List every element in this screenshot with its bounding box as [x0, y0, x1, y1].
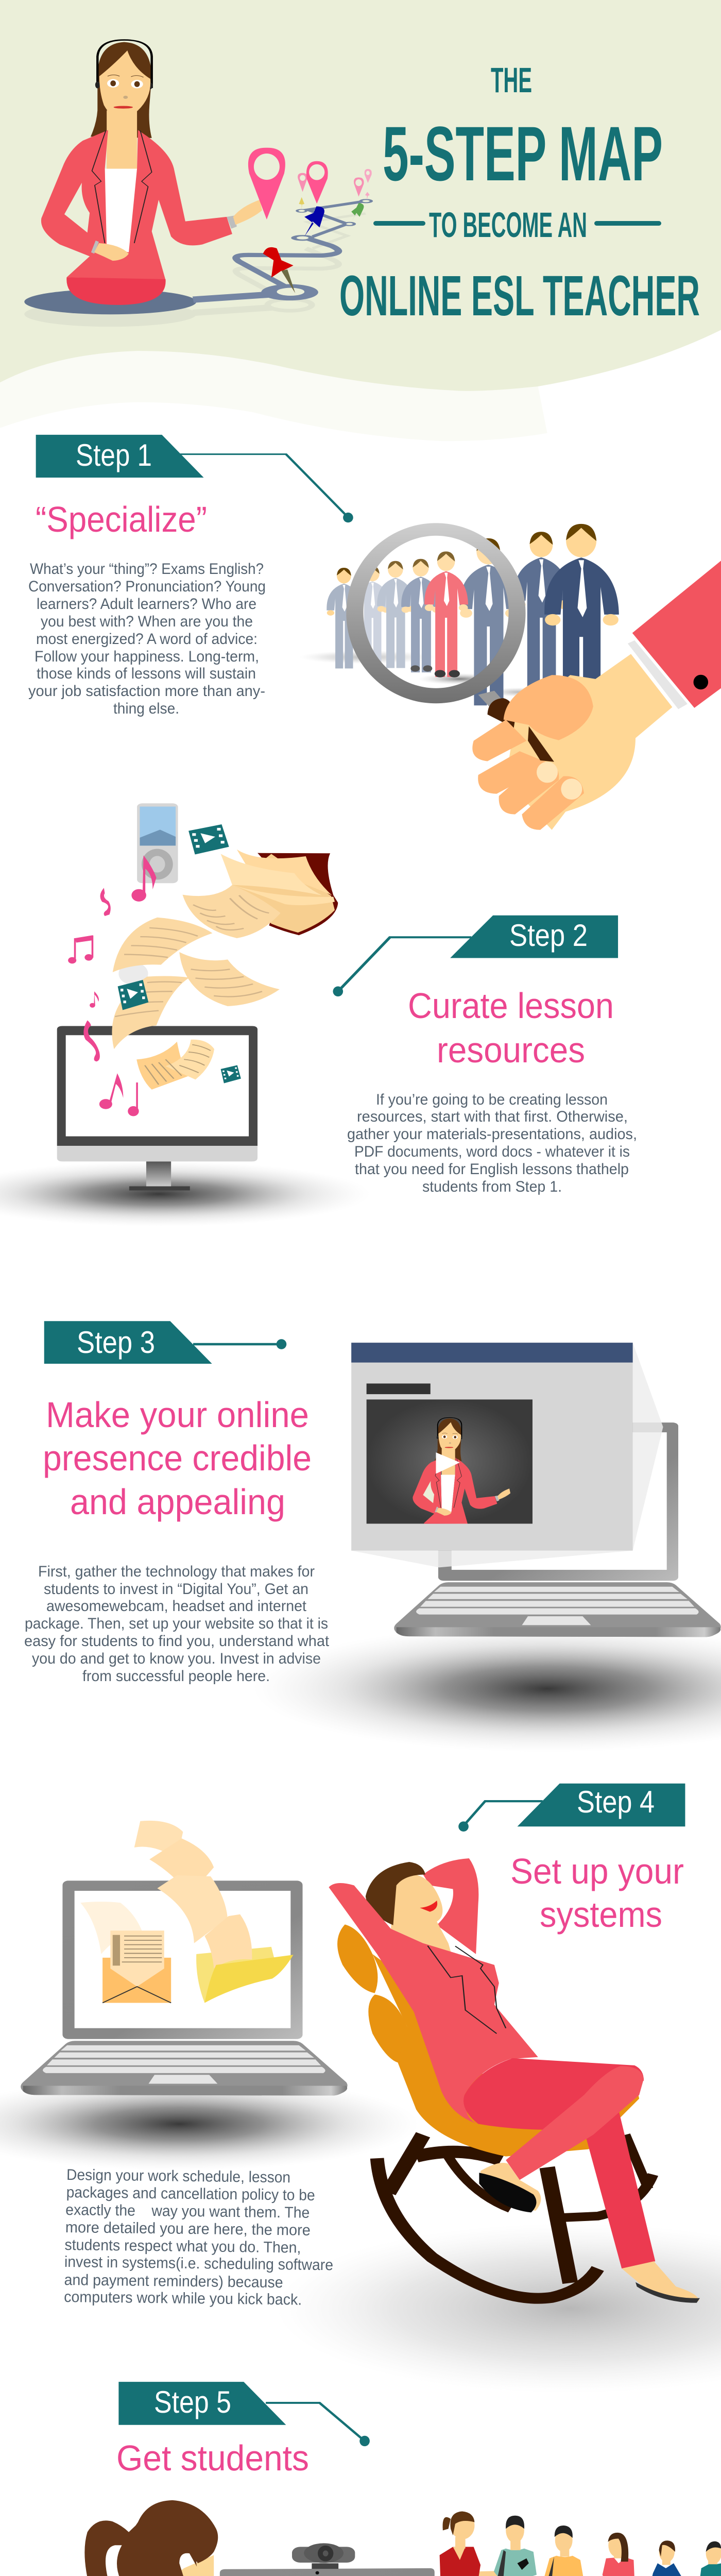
step 5 connector	[266, 2403, 370, 2446]
step 1 body text: you best with? When are you the	[41, 613, 253, 630]
step 1 body text	[28, 561, 266, 717]
illustration: teacher on map route	[24, 40, 373, 327]
step 2 heading: resources	[437, 1030, 585, 1070]
header panel	[24, 40, 700, 328]
illustration: monitor with flying resources	[0, 803, 370, 1227]
step 2 body text: resources, start with that first. Otherwise,	[357, 1108, 628, 1125]
step 1 body text: those kinds of lessons will sustain	[37, 665, 256, 682]
step 1 badge: Step 1	[76, 438, 152, 472]
step 1 body text: thing else.	[113, 700, 179, 717]
step 1 body text: learners? Adult learners? Who are	[37, 596, 256, 613]
step 1 body text: Conversation? Pronunciation? Young	[28, 578, 266, 595]
step 1 body text: What’s your “thing”? Exams English?	[30, 561, 264, 578]
step 1 body text: your job satisfaction more than any-	[28, 683, 265, 700]
step 3 heading: and appealing	[70, 1482, 285, 1522]
step 1 badge	[36, 435, 204, 478]
illustration: group of students	[405, 2512, 721, 2576]
illustration: laptop with video web page	[291, 1343, 721, 1743]
step 3 badge	[44, 1321, 212, 1364]
step 2 body text	[347, 1091, 637, 1195]
step 1 body text: Follow your happiness. Long-term,	[35, 648, 259, 665]
title: THE: THE	[491, 60, 532, 100]
step 4 body text: and payment reminders) because	[64, 2272, 283, 2291]
step 5 badge	[118, 2382, 286, 2425]
step 3 heading	[43, 1395, 312, 1522]
step 1 body text: most energized? A word of advice:	[36, 631, 258, 648]
step 4 body text	[64, 2166, 334, 2309]
step 4 body text: Design your work schedule, lesson	[66, 2166, 290, 2186]
illustration: magnifier over line of people	[299, 523, 721, 830]
illustration: teacher relaxing in rocking chair	[276, 1858, 721, 2393]
illustration: laptop with mail and folder	[0, 1821, 419, 2171]
step 3 body text	[24, 1563, 330, 1685]
step 2 badge: Step 2	[509, 918, 588, 953]
step 3 body text: First, gather the technology that makes for	[38, 1563, 315, 1580]
step 2 heading	[408, 986, 614, 1070]
step 3 connector	[193, 1339, 286, 1349]
step 5 badge: Step 5	[154, 2385, 231, 2419]
step 2 body text: that you need for English lessons thathelp	[355, 1161, 629, 1178]
step 4 heading: Set up your	[510, 1851, 684, 1891]
step 4 body text: exactly the way you want them. The	[65, 2201, 310, 2222]
step 4 body text: packages and cancellation policy to be	[66, 2184, 315, 2204]
step 5 heading: Get students	[116, 2438, 309, 2478]
step 2 body text: students from Step 1.	[422, 1178, 562, 1195]
step 2 badge	[450, 916, 618, 958]
background: top green wave	[0, 0, 721, 391]
title: to become an: TO BECOME AN	[429, 205, 587, 245]
step 2 body text: If you’re going to be creating lesson	[376, 1091, 608, 1108]
panel: step 2	[0, 803, 637, 1227]
step 4 badge: Step 4	[577, 1785, 655, 1819]
step 4 body text: students respect what you do. Then,	[64, 2236, 301, 2257]
step 1 heading: “Specialize”	[36, 499, 207, 539]
background: top light layer	[0, 351, 547, 441]
panel: step 5	[35, 2382, 721, 2576]
step 3 badge: Step 3	[77, 1325, 155, 1360]
step 3 body text: students to invest in “Digital You”, Get an	[44, 1581, 308, 1598]
illustration: laptop on video call	[220, 2543, 435, 2576]
step 3 heading: presence credible	[43, 1438, 312, 1478]
panel: step 1	[28, 435, 721, 830]
panel: step 3	[24, 1321, 721, 1752]
step 4 heading: systems	[540, 1894, 662, 1935]
step 2 connector	[333, 937, 471, 996]
step 4 badge	[518, 1784, 685, 1826]
step 2 heading: Curate lesson	[408, 986, 614, 1026]
step 2 body text: PDF documents, word docs - whatever it is	[354, 1143, 630, 1160]
step 3 body text: you do and get to know you. Invest in advise	[32, 1650, 321, 1667]
illustration: teacher seen from behind	[35, 2500, 449, 2576]
step 2 body text: gather your materials-presentations, audios,	[347, 1126, 637, 1143]
step 4 body text: computers work while you kick back.	[64, 2289, 302, 2309]
step 3 heading: Make your online	[46, 1395, 309, 1435]
step 1 connector	[180, 454, 353, 522]
step 3 body text: easy for students to find you, understand what	[24, 1633, 330, 1650]
step 3 body text: package. Then, set up your website so that it is	[25, 1615, 328, 1632]
step 4 body text: invest in systems(i.e. scheduling software	[64, 2253, 333, 2274]
step 4 body text: more detailed you are here, the more	[65, 2219, 311, 2239]
step 3 body text: awesomewebcam, headset and internet	[46, 1598, 307, 1615]
step 4 connector	[458, 1801, 543, 1832]
step 3 body text: from successful people here.	[82, 1668, 270, 1685]
panel: step 4	[0, 1784, 721, 2393]
step 4 heading	[510, 1851, 684, 1935]
